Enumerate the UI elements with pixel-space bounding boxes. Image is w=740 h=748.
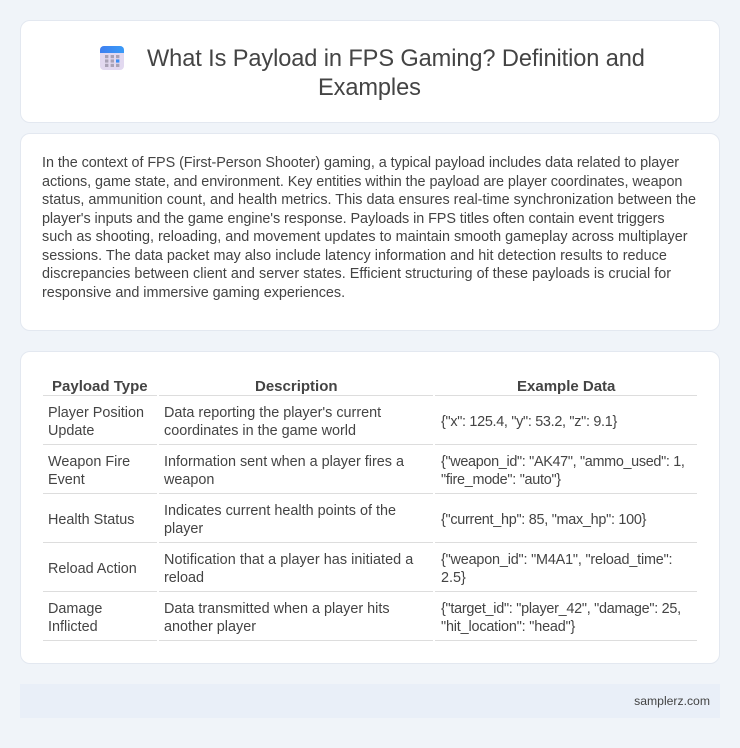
table row: health status: Health Status: [48, 512, 134, 528]
text block: introduction: such as shooting, reloading, and movement updates to maintain smooth gameplay across multiplayer: [42, 229, 688, 245]
text block: introduction: discrepancies between client and server states. Efficient structuring of these payloads is crucial for: [42, 266, 671, 282]
title: What Is Payload in FPS Gaming? Definition and: [147, 46, 645, 72]
table row: weapon fire event: Weapon Fire: [48, 454, 130, 470]
text block: introduction: actions, game state, and environment. Key entities within the payload are player coordinates, weapon: [42, 174, 682, 190]
table row: reload action: Notification that a player has initiated a: [164, 552, 413, 568]
table row: player position update: Data reporting the player's current: [164, 405, 381, 421]
panel: title card: [20, 20, 720, 123]
table row: player position update: coordinates in the game world: [164, 423, 356, 439]
table header row: Payload Type: [52, 378, 148, 395]
panel: payload table: [20, 351, 720, 664]
table row: reload action: {"weapon_id": "M4A1", "reload_time":: [441, 552, 672, 568]
table row: reload action: 2.5}: [441, 570, 466, 586]
table row: reload action: Reload Action: [48, 561, 137, 577]
table header row: Description: [255, 378, 338, 395]
text block: introduction: responsive and immersive gaming experiences.: [42, 285, 345, 301]
table row: player position update: {"x": 125.4, "y": 53.2, "z": 9.1}: [441, 414, 617, 430]
table row: damage inflicted: [43, 601, 697, 641]
table row: player position update: Update: [48, 423, 94, 439]
table: payload types: [43, 378, 697, 641]
table row: weapon fire event: weapon: [164, 472, 214, 488]
table row: damage inflicted: Data transmitted when a player hits: [164, 601, 390, 617]
title: [147, 46, 645, 101]
table row: player position update: Player Position: [48, 405, 144, 421]
table header row: [43, 378, 697, 396]
footer bar: [20, 684, 720, 718]
table row: health status: {"current_hp": 85, "max_hp": 100}: [441, 512, 646, 528]
table row: damage inflicted: another player: [164, 619, 256, 635]
table row: weapon fire event: {"weapon_id": "AK47", "ammo_used": 1,: [441, 454, 685, 470]
table row: weapon fire event: "fire_mode": "auto"}: [441, 472, 561, 488]
table row: reload action: [43, 552, 697, 592]
table row: health status: Indicates current health points of the: [164, 503, 396, 519]
table row: weapon fire event: Event: [48, 472, 85, 488]
text block: introduction: player's inputs and the game engine's response. Payloads in FPS titles often contain event triggers: [42, 211, 665, 227]
panel: introduction text: [20, 133, 720, 331]
title: Examples: [318, 75, 421, 101]
text block: introduction: status, ammunition count, and health metrics. This data ensures real-time synchronization between the: [42, 192, 696, 208]
text block: introduction: [42, 155, 696, 301]
table row: damage inflicted: Damage: [48, 601, 102, 617]
text block: introduction: In the context of FPS (First-Person Shooter) gaming, a typical payload includes data related to player: [42, 155, 679, 171]
icon: calendar: [100, 46, 124, 70]
table row: weapon fire event: [43, 454, 697, 494]
table row: weapon fire event: Information sent when a player fires a: [164, 454, 404, 470]
table header row: Example Data: [517, 378, 615, 395]
table row: health status: player: [164, 521, 203, 537]
table row: damage inflicted: Inflicted: [48, 619, 98, 635]
table row: reload action: reload: [164, 570, 204, 586]
table row: damage inflicted: "hit_location": "head"}: [441, 619, 575, 635]
footer text: source: samplerz.com: [634, 694, 710, 708]
table row: health status: [43, 503, 697, 543]
table row: damage inflicted: {"target_id": "player_42", "damage": 25,: [441, 601, 681, 617]
text block: introduction: sessions. The data packet may also include latency information and hit detection results to reduce: [42, 248, 667, 264]
table row: player position update: [43, 405, 697, 445]
